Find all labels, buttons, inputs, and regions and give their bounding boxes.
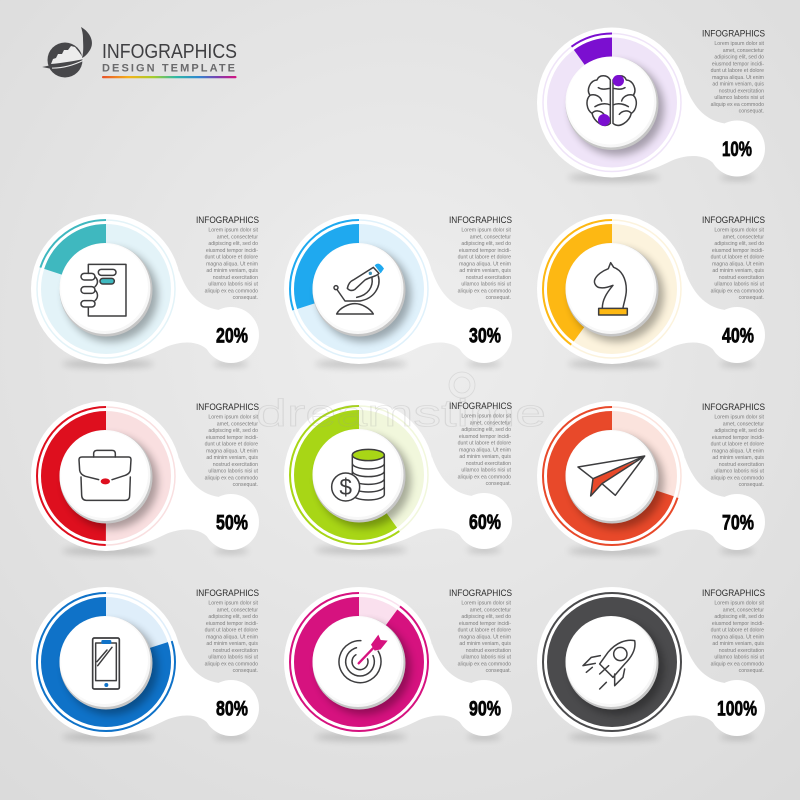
body text: nostrud exercitation bbox=[213, 275, 258, 281]
body text: amet, consectetur bbox=[217, 421, 258, 427]
body text: dunt ut labore et dolore bbox=[711, 255, 764, 261]
body text: ullamco laboris nisi ut bbox=[714, 95, 765, 101]
panel: 20% bbox=[31, 214, 259, 368]
icon: coins: $ bbox=[339, 474, 352, 500]
body text: magna aliqua. Ut enim bbox=[712, 261, 764, 267]
body text: nostrud exercitation bbox=[466, 275, 511, 281]
body text: aliquip ex ea commodo bbox=[205, 661, 258, 667]
body text: ad minim veniam, quis bbox=[459, 454, 511, 460]
icon: microscope bbox=[334, 264, 384, 314]
body text: adipiscing elit, sed do bbox=[208, 614, 258, 620]
body text: eiusmod tempor incidi- bbox=[712, 435, 764, 441]
body text bbox=[458, 414, 512, 487]
panel: 50% bbox=[31, 401, 259, 555]
percent: 90% bbox=[469, 698, 501, 720]
heading: INFOGRAPHICS bbox=[196, 401, 259, 412]
percent: 60% bbox=[469, 511, 501, 534]
body text: ad minim veniam, quis bbox=[459, 268, 511, 274]
body text: adipiscing elit, sed do bbox=[714, 428, 764, 434]
body text: adipiscing elit, sed do bbox=[461, 241, 511, 247]
body text: dunt ut labore et dolore bbox=[711, 628, 764, 634]
body text bbox=[711, 41, 765, 115]
body text: dunt ut labore et dolore bbox=[205, 628, 258, 634]
heading: INFOGRAPHICS bbox=[702, 401, 765, 412]
body text: nostrud exercitation bbox=[466, 461, 511, 467]
body text: magna aliqua. Ut enim bbox=[712, 634, 764, 640]
body text: eiusmod tempor incidi- bbox=[459, 621, 511, 627]
body text: eiusmod tempor incidi- bbox=[206, 621, 258, 627]
percent: 40% bbox=[722, 324, 754, 348]
icon: brain bbox=[587, 75, 636, 126]
body text bbox=[711, 414, 765, 488]
body text: amet, consectetur bbox=[723, 48, 764, 54]
ring chart 70% bbox=[543, 407, 681, 545]
ring chart 100% bbox=[543, 593, 681, 731]
icon: target with dart bbox=[331, 633, 389, 690]
body text: Lorem ipsum dolor sit bbox=[714, 41, 765, 47]
body text: aliquip ex ea commodo bbox=[458, 474, 511, 480]
body text: amet, consectetur bbox=[217, 607, 258, 613]
body text: eiusmod tempor incidi- bbox=[459, 434, 511, 440]
body text bbox=[711, 600, 765, 674]
icon: coins bbox=[332, 449, 384, 501]
body text: adipiscing elit, sed do bbox=[461, 614, 511, 620]
body text bbox=[205, 414, 259, 488]
body text: consequat. bbox=[739, 668, 764, 674]
body text: consequat. bbox=[739, 109, 764, 115]
body text: eiusmod tempor incidi- bbox=[459, 248, 511, 254]
heading: INFOGRAPHICS bbox=[449, 214, 512, 225]
body text: amet, consectetur bbox=[470, 234, 511, 240]
ring chart 80% bbox=[37, 593, 175, 731]
body text: eiusmod tempor incidi- bbox=[206, 248, 258, 254]
body text: magna aliqua. Ut enim bbox=[459, 447, 511, 453]
body text: ad minim veniam, quis bbox=[206, 641, 258, 647]
body text: ullamco laboris nisi ut bbox=[208, 655, 259, 661]
body text bbox=[205, 600, 259, 674]
body text: eiusmod tempor incidi- bbox=[712, 248, 764, 254]
body text: adipiscing elit, sed do bbox=[714, 54, 764, 60]
ring chart 60% bbox=[290, 406, 428, 544]
body text: magna aliqua. Ut enim bbox=[712, 75, 764, 81]
body text: nostrud exercitation bbox=[719, 648, 764, 654]
body text: Lorem ipsum dolor sit bbox=[461, 414, 512, 420]
body text: aliquip ex ea commodo bbox=[711, 661, 764, 667]
logo subtitle: DESIGN TEMPLATE bbox=[102, 62, 235, 74]
body text: aliquip ex ea commodo bbox=[711, 288, 764, 294]
icon: paper plane bbox=[578, 456, 645, 496]
body text: Lorem ipsum dolor sit bbox=[208, 600, 259, 606]
body text: Lorem ipsum dolor sit bbox=[461, 600, 512, 606]
body text: aliquip ex ea commodo bbox=[711, 475, 764, 481]
heading: INFOGRAPHICS bbox=[702, 587, 765, 598]
body text: ad minim veniam, quis bbox=[712, 268, 764, 274]
body text: magna aliqua. Ut enim bbox=[459, 634, 511, 640]
body text: adipiscing elit, sed do bbox=[208, 241, 258, 247]
ring chart 90% bbox=[290, 593, 428, 731]
rainbow bar bbox=[102, 76, 236, 78]
body text: amet, consectetur bbox=[723, 607, 764, 613]
body text: nostrud exercitation bbox=[213, 462, 258, 468]
body text: aliquip ex ea commodo bbox=[458, 661, 511, 667]
ring chart 30% bbox=[290, 220, 428, 358]
body text: ad minim veniam, quis bbox=[459, 641, 511, 647]
body text: dunt ut labore et dolore bbox=[711, 68, 764, 74]
body text: Lorem ipsum dolor sit bbox=[714, 414, 765, 420]
percent: 30% bbox=[469, 324, 501, 348]
body text: consequat. bbox=[233, 295, 258, 301]
percent: 100% bbox=[717, 698, 757, 720]
body text: consequat. bbox=[486, 481, 511, 487]
icon: smartphone bbox=[93, 638, 119, 689]
percent: 70% bbox=[722, 512, 754, 534]
body text: dunt ut labore et dolore bbox=[458, 628, 511, 634]
body text: nostrud exercitation bbox=[719, 462, 764, 468]
panel: 100% bbox=[537, 587, 765, 741]
body text: ullamco laboris nisi ut bbox=[208, 469, 259, 475]
body text: aliquip ex ea commodo bbox=[458, 288, 511, 294]
body text: ullamco laboris nisi ut bbox=[461, 655, 512, 661]
body text bbox=[205, 228, 259, 301]
body text: nostrud exercitation bbox=[466, 648, 511, 654]
ring chart 20% bbox=[37, 220, 175, 358]
body text: consequat. bbox=[233, 668, 258, 674]
body text: magna aliqua. Ut enim bbox=[459, 261, 511, 267]
heading: INFOGRAPHICS bbox=[449, 400, 512, 411]
body text: dunt ut labore et dolore bbox=[205, 255, 258, 261]
body text: ad minim veniam, quis bbox=[712, 641, 764, 647]
body text bbox=[458, 600, 512, 674]
panel: 10% bbox=[537, 28, 765, 182]
body text: eiusmod tempor incidi- bbox=[712, 61, 764, 67]
watermark: dreamstime bbox=[256, 393, 546, 435]
percent: 50% bbox=[216, 512, 248, 534]
body text: ullamco laboris nisi ut bbox=[461, 468, 512, 474]
body text: ad minim veniam, quis bbox=[712, 82, 764, 88]
heading: INFOGRAPHICS bbox=[702, 214, 765, 225]
body text: amet, consectetur bbox=[470, 420, 511, 426]
body text: amet, consectetur bbox=[470, 607, 511, 613]
panel: 70% bbox=[537, 401, 765, 555]
body text: Lorem ipsum dolor sit bbox=[714, 600, 765, 606]
body text: dunt ut labore et dolore bbox=[458, 441, 511, 447]
body text: aliquip ex ea commodo bbox=[711, 102, 764, 108]
heading: INFOGRAPHICS bbox=[196, 587, 259, 598]
body text: ullamco laboris nisi ut bbox=[461, 282, 512, 288]
icon: rocket bbox=[583, 640, 635, 689]
body text: nostrud exercitation bbox=[719, 88, 764, 94]
body text: ullamco laboris nisi ut bbox=[714, 469, 765, 475]
body text: eiusmod tempor incidi- bbox=[206, 435, 258, 441]
body text: consequat. bbox=[739, 482, 764, 488]
panel: 60% bbox=[284, 400, 512, 554]
ring chart 50% bbox=[37, 407, 175, 545]
panel: 90% bbox=[284, 587, 512, 741]
body text: aliquip ex ea commodo bbox=[205, 475, 258, 481]
body text: consequat. bbox=[486, 668, 511, 674]
body text bbox=[458, 228, 512, 301]
body text: magna aliqua. Ut enim bbox=[206, 261, 258, 267]
body text: dunt ut labore et dolore bbox=[458, 255, 511, 261]
watermark bbox=[256, 372, 546, 435]
body text: ad minim veniam, quis bbox=[206, 268, 258, 274]
heading: INFOGRAPHICS bbox=[702, 28, 765, 38]
percent: 20% bbox=[216, 324, 248, 348]
body text: Lorem ipsum dolor sit bbox=[208, 414, 259, 420]
body text: consequat. bbox=[233, 482, 258, 488]
body text: dunt ut labore et dolore bbox=[205, 442, 258, 448]
logo title: INFOGRAPHICS bbox=[102, 40, 237, 63]
body text: amet, consectetur bbox=[723, 421, 764, 427]
body text: ullamco laboris nisi ut bbox=[714, 655, 765, 661]
panel: 80% bbox=[31, 587, 259, 741]
logo bbox=[42, 27, 237, 78]
body text: consequat. bbox=[739, 295, 764, 301]
body text: ullamco laboris nisi ut bbox=[208, 282, 259, 288]
body text: Lorem ipsum dolor sit bbox=[208, 228, 259, 234]
ring chart 10% bbox=[543, 34, 681, 172]
body text: amet, consectetur bbox=[217, 234, 258, 240]
heading: INFOGRAPHICS bbox=[449, 587, 512, 598]
icon: chess knight bbox=[594, 263, 627, 315]
body text: nostrud exercitation bbox=[213, 648, 258, 654]
icon: logo globe with skyline bbox=[42, 27, 92, 78]
percent: 10% bbox=[722, 138, 752, 161]
body text: consequat. bbox=[486, 295, 511, 301]
ring chart 40% bbox=[543, 220, 681, 358]
percent: 80% bbox=[216, 698, 248, 720]
body text: dunt ut labore et dolore bbox=[711, 442, 764, 448]
body text: ad minim veniam, quis bbox=[712, 455, 764, 461]
body text: ad minim veniam, quis bbox=[206, 455, 258, 461]
body text: ullamco laboris nisi ut bbox=[714, 282, 765, 288]
body text: adipiscing elit, sed do bbox=[208, 428, 258, 434]
icon: notebook bbox=[81, 264, 126, 316]
body text: magna aliqua. Ut enim bbox=[206, 634, 258, 640]
panel: 40% bbox=[537, 214, 765, 368]
panel: 30% bbox=[284, 214, 512, 368]
icon: briefcase bbox=[79, 450, 131, 500]
body text: Lorem ipsum dolor sit bbox=[461, 228, 512, 234]
heading: INFOGRAPHICS bbox=[196, 214, 259, 225]
body text: adipiscing elit, sed do bbox=[461, 427, 511, 433]
body text: eiusmod tempor incidi- bbox=[712, 621, 764, 627]
body text: Lorem ipsum dolor sit bbox=[714, 228, 765, 234]
body text: nostrud exercitation bbox=[719, 275, 764, 281]
body text: amet, consectetur bbox=[723, 234, 764, 240]
body text: magna aliqua. Ut enim bbox=[206, 448, 258, 454]
body text: aliquip ex ea commodo bbox=[205, 288, 258, 294]
body text: adipiscing elit, sed do bbox=[714, 241, 764, 247]
body text: adipiscing elit, sed do bbox=[714, 614, 764, 620]
body text bbox=[711, 228, 765, 301]
body text: magna aliqua. Ut enim bbox=[712, 448, 764, 454]
